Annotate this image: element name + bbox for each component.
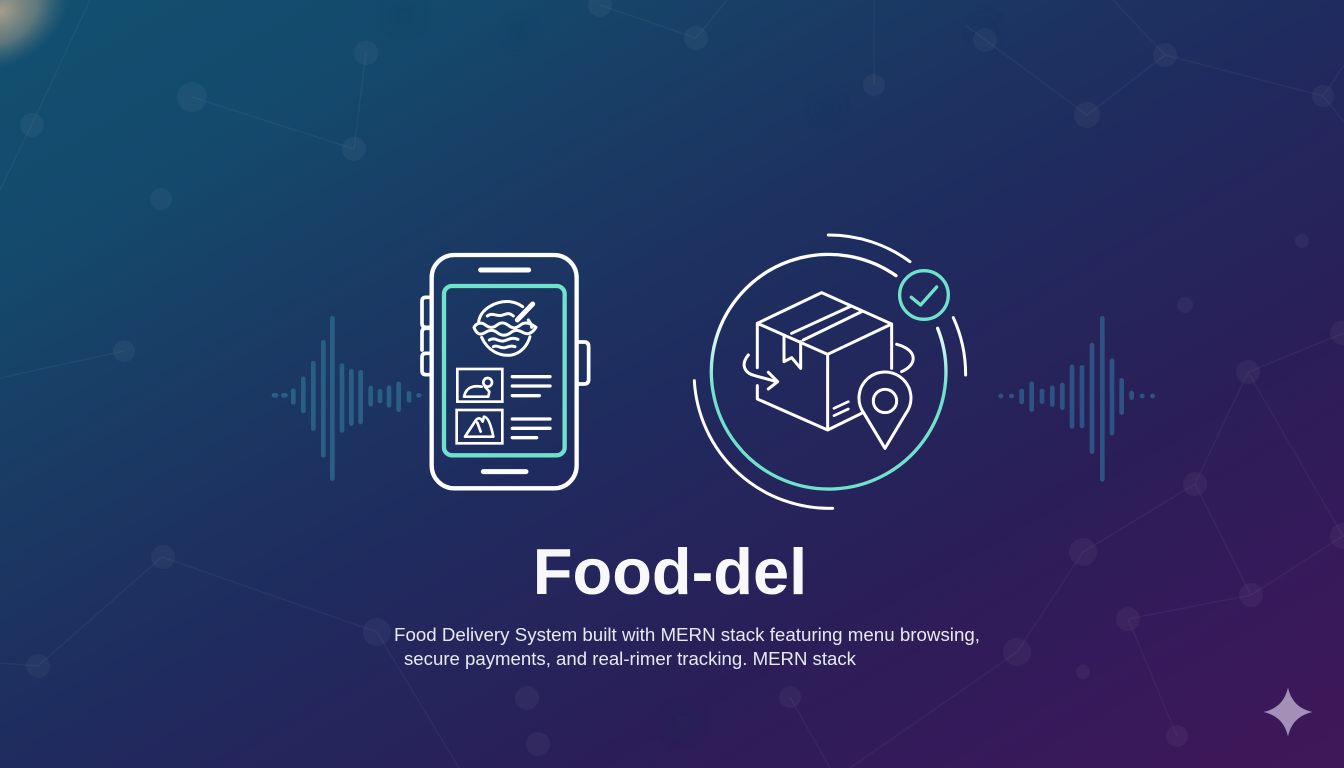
list item 1 thumbnail and lines	[457, 369, 550, 402]
description text	[394, 624, 980, 669]
check badge	[900, 271, 948, 319]
cardboard box	[757, 293, 892, 430]
icon: smartphone with food app	[422, 255, 589, 488]
rotation arrows	[744, 344, 913, 389]
icon: delivery package in circle	[694, 235, 966, 508]
description text: secure payments, and real-rimer tracking. MERN stack	[404, 648, 857, 669]
phone body	[432, 255, 577, 488]
corner light glow	[0, 0, 90, 90]
food bowl icon	[474, 302, 536, 355]
outer motion arcs	[694, 235, 966, 508]
phone speaker and home bar	[481, 270, 529, 472]
location pin	[859, 372, 911, 448]
phone side buttons	[422, 297, 589, 384]
description text: Food Delivery System built with MERN stack featuring menu browsing,	[394, 624, 980, 645]
left sound waveform	[274, 318, 419, 479]
dark smudges	[395, 7, 993, 732]
right sound waveform	[1001, 318, 1153, 479]
icon: sparkle watermark	[1264, 688, 1312, 736]
list item 2 thumbnail and lines	[457, 410, 550, 443]
main ring	[711, 254, 946, 489]
title: Food-del	[533, 535, 807, 608]
teal screen frame	[444, 286, 565, 455]
